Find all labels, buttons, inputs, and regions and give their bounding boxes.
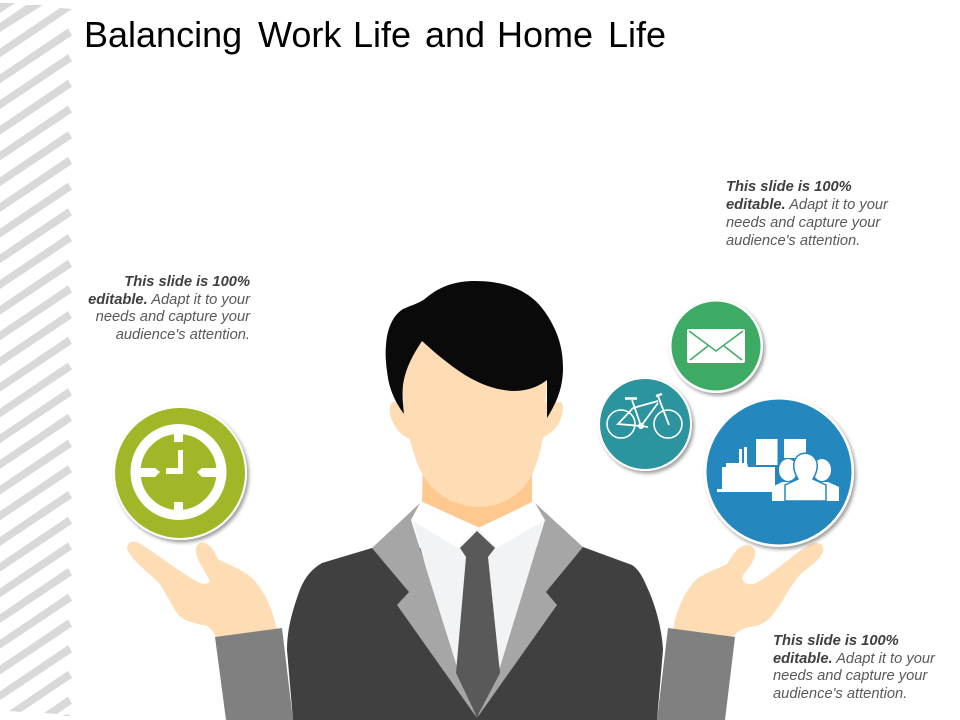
text block: top right: needs and capture your — [726, 215, 881, 231]
title: Life — [608, 14, 666, 55]
text block: left — [88, 274, 251, 343]
text block: bottom right — [773, 633, 936, 702]
decorative diagonal stripes band — [0, 3, 72, 716]
text block: left: audience's attention. — [116, 327, 250, 343]
jacket — [287, 547, 663, 720]
text block: top right: audience's attention. — [726, 233, 860, 249]
left ear — [390, 402, 415, 440]
text block: top right: This slide is 100% — [726, 179, 852, 195]
text block: bottom right: needs and capture your — [773, 668, 928, 684]
neck — [422, 465, 532, 528]
text block: left: editable. Adapt it to your — [88, 292, 251, 308]
collar right — [478, 502, 545, 548]
hair — [386, 281, 563, 418]
tie — [456, 531, 500, 717]
text block: left: needs and capture your — [96, 309, 251, 325]
title: Home — [497, 14, 593, 55]
shirt — [412, 502, 545, 715]
text block: bottom right: editable. Adapt it to your — [773, 651, 936, 667]
text block: bottom right: This slide is 100% — [773, 633, 899, 649]
text block: bottom right: audience's attention. — [773, 686, 907, 702]
title: Balancing — [84, 14, 242, 55]
right ear — [538, 402, 563, 438]
person illustration — [127, 281, 823, 720]
left sleeve — [215, 628, 293, 720]
text block: top right — [726, 179, 889, 249]
face — [403, 330, 547, 507]
lapel left — [372, 503, 477, 718]
icon: bicycle circle — [598, 377, 692, 471]
title: Work — [258, 14, 342, 55]
icon: clock circle — [113, 406, 247, 540]
text block: top right: editable. Adapt it to your — [726, 197, 889, 213]
title: Life — [353, 14, 411, 55]
icon: office team circle — [704, 397, 854, 547]
right sleeve — [657, 628, 735, 720]
right hand — [673, 543, 823, 638]
collar left — [411, 502, 478, 548]
left hand — [127, 542, 277, 638]
icon: email circle — [669, 299, 763, 393]
title: and — [425, 14, 485, 55]
text block: left: This slide is 100% — [124, 274, 250, 290]
lapel right — [477, 503, 583, 718]
